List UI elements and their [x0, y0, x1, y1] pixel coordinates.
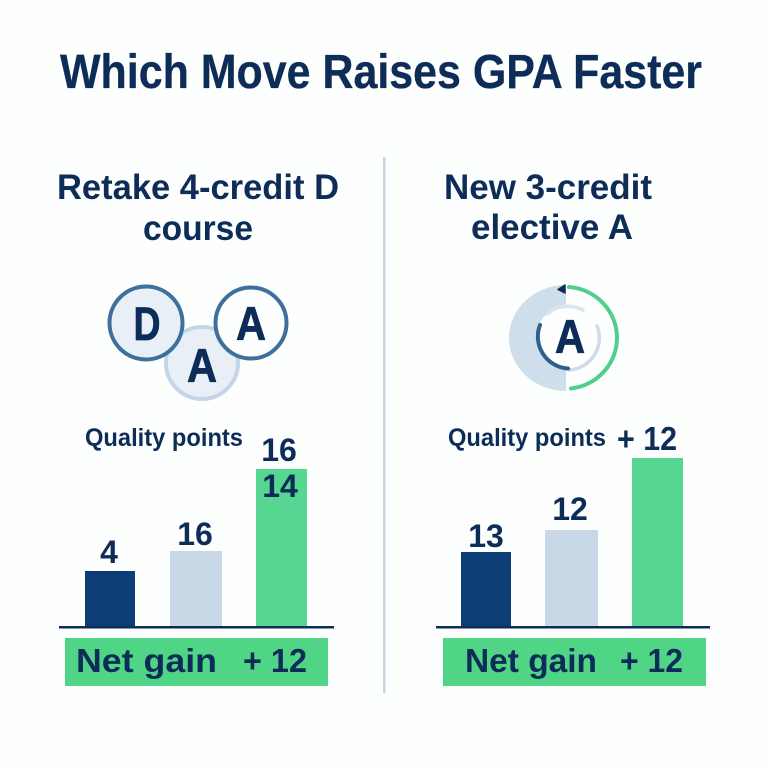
- callout: net gain retake: Net gain: [76, 642, 217, 679]
- icon: grade circles D A A: D: [134, 297, 160, 350]
- label: quality points: Quality points: [448, 424, 606, 452]
- icon: progress ring with A: A: [555, 310, 585, 363]
- panel: new elective: [436, 168, 710, 686]
- callout: net gain elective: Net gain: [465, 642, 597, 679]
- bar chart: elective: [436, 458, 710, 628]
- bar chart: elective: 13: [468, 518, 504, 554]
- bar chart: retake: 4: [100, 534, 118, 570]
- bar chart: retake: 16: [177, 516, 213, 552]
- heading: retake: [57, 168, 339, 248]
- heading: retake: course: [143, 209, 253, 248]
- callout: net gain retake: [65, 638, 328, 686]
- heading: retake: Retake 4-credit D: [57, 168, 339, 207]
- value: plus 12: + 12: [617, 420, 677, 457]
- bar chart: retake: [59, 432, 334, 628]
- icon: grade circles D A A: [110, 286, 286, 399]
- bar chart: elective: 12: [552, 491, 588, 527]
- icon: grade circles D A A: A: [187, 339, 217, 392]
- callout: net gain elective: + 12: [620, 642, 683, 679]
- panel: retake course: [57, 168, 339, 686]
- callout: net gain elective: [443, 638, 706, 686]
- title: Which Move Raises GPA Faster: [60, 46, 702, 99]
- bar chart: retake: 14: [262, 468, 298, 504]
- icon: progress ring with A: [509, 285, 617, 391]
- label: quality points: Quality points: [85, 424, 243, 452]
- heading: elective: New 3-credit: [444, 168, 652, 207]
- icon: grade circles D A A: A: [236, 297, 266, 350]
- bar chart: retake: 16: [261, 432, 297, 468]
- callout: net gain retake: + 12: [243, 642, 307, 679]
- heading: elective: elective A: [471, 208, 633, 247]
- heading: elective: [444, 168, 652, 247]
